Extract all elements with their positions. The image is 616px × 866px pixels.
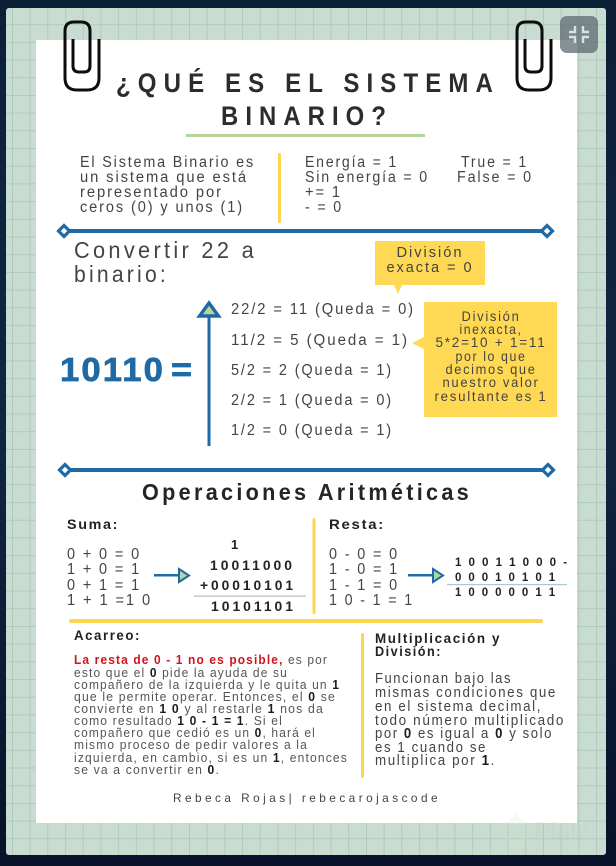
heading: acarreo: Acarreo: [74, 628, 141, 643]
divider: yellow horizontal [69, 619, 543, 623]
text block: multiplicación explanation: por 0 es igual a 0 y solo [375, 725, 553, 742]
text block: definition: un sistema que está [80, 169, 248, 186]
text block: division steps: 22/2 = 11 (Queda = 0) [231, 301, 415, 318]
text block: acarreo explanation: que le permite operar. Entonces, el 0 se [74, 690, 336, 704]
divider: yellow vertical middle [312, 518, 316, 614]
title: ¿QUÉ ES EL SISTEMA [116, 67, 500, 98]
callout: división inexacta: 5*2=10 + 1=11 [436, 334, 546, 350]
text block: binary equivalences [305, 154, 533, 216]
text block: binary equivalences: Energía = 1 [305, 154, 398, 171]
callout: división exacta: División [396, 244, 464, 261]
callout: división inexacta [412, 302, 557, 417]
heading: multiplicación y división: Multiplicación y [375, 631, 501, 646]
icon: right paperclip [517, 22, 551, 90]
callout: división inexacta: por lo que [456, 348, 526, 364]
text block: division steps [231, 301, 415, 439]
callout: división inexacta: División [462, 308, 520, 324]
text block: multiplicación explanation: es 1 cuando se [375, 739, 487, 756]
callout: división exacta: exacta = 0 [386, 259, 474, 276]
arrow: suma [154, 569, 189, 582]
heading: convertir 22 a binario: binario: [74, 261, 169, 287]
callout: división inexacta: nuestro valor [442, 374, 540, 390]
text block: multiplicación explanation: todo número multiplicado [375, 712, 565, 729]
text block: division steps: 5/2 = 2 (Queda = 1) [231, 362, 393, 379]
panel: suma [67, 516, 306, 614]
text block: suma example: 10011000 [210, 557, 295, 573]
callout: división inexacta: decimos que [446, 361, 536, 377]
text block: multiplicación explanation [375, 670, 565, 769]
text block: resta example: 1 0 0 0 0 0 1 1 [455, 585, 557, 599]
text block: acarreo explanation: esto que el 0 pide la ayuda de su [74, 666, 288, 680]
arrow: upward reading direction [200, 303, 218, 446]
text block: resta rules: 1 0 - 1 = 1 [329, 592, 414, 609]
icon: exit fullscreen button [560, 16, 598, 53]
text block: suma rules: 0 + 0 = 0 [67, 546, 141, 563]
text block: acarreo explanation: La resta de 0 - 1 no es posible, es por [74, 653, 328, 667]
text block: definition: ceros (0) y unos (1) [80, 199, 244, 216]
text block: binary equivalences: += 1 [305, 184, 342, 201]
title: BINARIO? [221, 101, 393, 131]
callout: división exacta [375, 241, 485, 294]
text block: suma rules [67, 546, 152, 609]
text block: acarreo explanation: como resultado 1 0 - 1 = 1. Si el [74, 714, 283, 728]
text block: definition: representado por [80, 184, 223, 201]
text block: suma rules: 0 + 1 = 1 [67, 577, 141, 594]
text block: resta rules: 1 - 1 = 0 [329, 577, 399, 594]
heading: multiplicación y división [375, 631, 501, 659]
watermark: Platzi: Platzi [534, 818, 595, 846]
text block: resta rules [329, 546, 414, 609]
text block: division steps: 1/2 = 0 (Queda = 1) [231, 422, 393, 439]
text block: suma rules: 1 + 0 = 1 [67, 561, 141, 578]
heading: convertir 22 a binario: Convertir 22 a [74, 237, 257, 263]
text block: binary equivalences: True = 1 [461, 154, 528, 171]
title underline [186, 134, 425, 137]
text block: division steps: 2/2 = 1 (Queda = 0) [231, 392, 393, 409]
heading: convertir 22 a binario [74, 237, 257, 287]
callout: división inexacta: inexacta, [460, 321, 522, 337]
heading: suma: Suma: [67, 516, 119, 532]
text block: suma example: +00010101 [200, 577, 296, 593]
footer: author credit: Rebeca Rojas| rebecarojascode [173, 791, 441, 805]
title [116, 67, 500, 131]
text block: acarreo explanation: compañero que cedió es un 0, hará el [74, 726, 316, 740]
text block: resta rules: 1 - 0 = 1 [329, 561, 399, 578]
text block: multiplicación explanation: en el sistema decimal, [375, 698, 542, 715]
text block: binary equivalences: False = 0 [457, 169, 533, 186]
divider: yellow vertical bottom [361, 633, 364, 778]
text block: suma example [194, 537, 306, 614]
panel: multiplicación y división [375, 631, 565, 769]
text block: resta rules: 0 - 0 = 0 [329, 546, 399, 563]
text block: acarreo explanation: se va a convertir en 0. [74, 763, 220, 777]
text block: multiplicación explanation: multiplica por 1. [375, 752, 496, 769]
text block: resta example: 1 0 0 1 1 0 0 0 - [455, 555, 569, 569]
text block: acarreo explanation: convierte en 1 0 y al restarle 1 nos da [74, 702, 324, 716]
text block: division steps: 11/2 = 5 (Queda = 1) [231, 332, 409, 349]
result: 10110 =: 10110 [60, 351, 165, 388]
text block: definition: El Sistema Binario es [80, 154, 255, 171]
text block: suma example: 10101101 [211, 598, 296, 614]
divider: blue line one [58, 226, 552, 236]
callout: división inexacta: resultante es 1 [434, 388, 548, 404]
text block: suma rules: 1 + 1 =1 0 [67, 592, 152, 609]
text block: multiplicación explanation: mismas condiciones que [375, 684, 557, 701]
panel: resta [329, 516, 569, 609]
watermark: Platzi [503, 817, 595, 848]
text block: binary equivalences: - = 0 [305, 199, 343, 216]
text block: definition [80, 154, 255, 216]
text block: acarreo explanation [74, 653, 348, 777]
divider: blue line two [60, 464, 554, 476]
panel: acarreo [74, 628, 348, 777]
text block: acarreo explanation: izquierda, en cambio, si es un 1, entonces [74, 751, 348, 765]
heading: operaciones aritméticas: Operaciones Aritméticas [142, 479, 472, 505]
panel: white sheet [36, 40, 577, 823]
text block: acarreo explanation: compañero de la izquierda y le quita un 1 [74, 678, 340, 692]
arrow: resta [408, 569, 443, 582]
heading: resta: Resta: [329, 516, 385, 532]
text block: resta example: 0 0 0 1 0 1 0 1 [455, 570, 557, 584]
heading: multiplicación y división: División: [375, 644, 442, 659]
text block: acarreo explanation: mismo proceso de pedir valores a la [74, 738, 308, 752]
text block: resta example [447, 555, 569, 599]
divider: yellow vertical top [278, 153, 281, 223]
result: 10110 =: = [171, 351, 192, 388]
icon: left paperclip [65, 22, 99, 90]
text block: binary equivalences: Sin energía = 0 [305, 169, 429, 186]
text block: suma example: 1 [231, 537, 238, 552]
text block: multiplicación explanation: Funcionan bajo las [375, 670, 512, 687]
